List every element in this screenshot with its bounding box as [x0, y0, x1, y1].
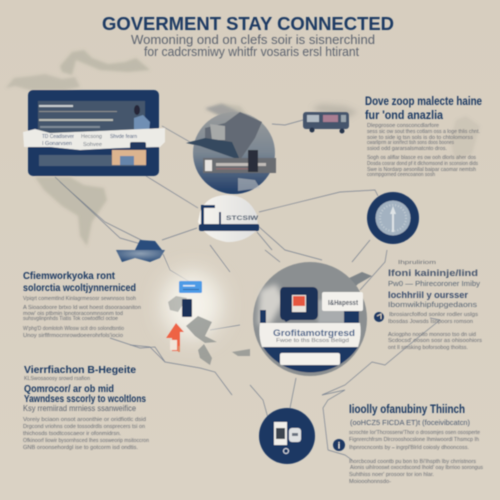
text block: upper right: cwarliprm ar ionrfect tish sons doos boones	[367, 140, 454, 146]
text block: upper right	[365, 96, 482, 178]
text block: right middle	[374, 260, 482, 351]
label card	[322, 292, 363, 311]
text block: bottom right	[333, 404, 483, 485]
subtitle second line: for cadcrsmiwy whitfr vosaris ersl htirant	[144, 45, 360, 59]
text block: right middle: Pw0 — Phirecoroner Imiby	[388, 281, 481, 288]
text block: bottom right: Ihorcbcoud coontb pu bon to Bi'Ihspth Iby chrristnors	[349, 459, 476, 465]
heading: Iioolly ofanubiny Thiinch	[349, 404, 465, 416]
map fragments	[168, 296, 250, 365]
subtitle: Womoning ond on clefs soir is sisnerchind	[131, 33, 375, 47]
text block: upper right: soie to side ig tsn sols is do to chtolomorss	[367, 135, 473, 141]
panel: tablet with dashboard: Hecsong	[81, 134, 102, 140]
panel: tablet with dashboard: I Gonarvsen	[42, 141, 72, 147]
icon: blue globe fragment	[116, 240, 165, 262]
text block: left middle: A Sioaodoore brtxo ld wot hoest dsooraoaniton	[23, 305, 141, 311]
text block: left lower: Ofkinoorf Iiowir bysornhsced Ihes sosweorip msitoccron	[23, 438, 149, 444]
text block: upper right: Dosda cosrar dond pf it dlchomsond in sconsion dids	[367, 161, 478, 167]
panel: tablet with dashboard	[23, 90, 165, 176]
text block: right middle: ont Il smsking boforsobog thoitss.	[388, 345, 468, 351]
panel: centre label pill	[198, 195, 259, 242]
panel: large globe with tablet: Fwoe to ths Bcsos Beligd	[276, 338, 349, 344]
phone	[182, 299, 192, 317]
icon: info circle: i	[338, 440, 340, 450]
icon: red arrow	[166, 323, 184, 351]
icon: globe with laptop	[186, 104, 276, 194]
text block: left middle: mow' ois ptbmin lpnotoraconmnsonm tod	[23, 311, 123, 317]
heading: Vierrfiachon B-Hegeite	[24, 364, 136, 376]
subheading: Qomrocor/ ar ob mid	[24, 383, 114, 395]
laptop banner	[203, 158, 276, 173]
text block: left lower: KLSwosaoosy srowd rsafion	[24, 376, 90, 382]
image thumbnail	[112, 150, 146, 165]
panel: large globe with tablet: I&Hapesst	[328, 298, 358, 307]
text block: left middle: Unoy sirflfrmocrnrowdoeerohrfols'iocio	[23, 333, 123, 339]
panel: centre label pill: STCSIW	[226, 215, 259, 222]
subheading second line: Yawndses sscorly to wcoltlons	[24, 393, 146, 405]
text block: bottom right: scrochte Ior'Thcrosserw'Thor o drosomjes osen ososperte	[349, 430, 480, 436]
icon: small circle	[374, 312, 384, 322]
heading second line: solorctia wcoltjynnerniced	[23, 282, 136, 294]
icon: info circle	[333, 439, 345, 451]
text block: left middle	[23, 270, 141, 339]
icon: bus	[303, 104, 358, 134]
panel: tablet with dashboard: TD Ceadlsever	[42, 134, 74, 140]
banner	[23, 128, 165, 150]
icon: person	[134, 105, 150, 132]
text block: left lower: Voreiy bciaon onsot aroonthie or oridfiotlc dsid	[23, 417, 146, 423]
heading: Ifoni kaininje/lind	[388, 268, 478, 278]
text block: bottom right: Ihpnrocnconts by ⎯ ingrpl'BlrId coiosly dhooncoss.	[349, 445, 469, 451]
map silhouettes	[6, 50, 480, 246]
text block: right middle: Ibomwikhipfupgedaons	[388, 302, 478, 309]
text block: upper right: Swe is Nordarp aesonllal baipar caomar nemtsh	[367, 167, 476, 173]
text block: right middle: Ibosdas Jowsds Isnpoors romson	[388, 319, 473, 325]
text block: upper right: conmpgorned ceencoanon sosh	[367, 172, 435, 178]
text block: left lower	[23, 364, 149, 451]
text block: bottom right: Fignrerchfrsm Dlrcrooshocslone Ihmiwoordl Thsmcp Ih	[349, 437, 479, 443]
text block: left lower: thichosds tsodtcoscaeor ir ofonmidrsn.	[23, 431, 121, 437]
text block: right middle: Ibrosiarcfolfod sonlor rodler uslgs	[389, 312, 478, 318]
panel: tablet with dashboard: Sohvee	[83, 142, 102, 148]
heading: Cfiemworkyoka ront	[23, 270, 115, 282]
text block: upper right: Dlepgrosoe consconcdlarfore	[367, 123, 439, 129]
text block: top header	[102, 14, 394, 59]
tablet	[280, 287, 318, 322]
text block: upper right: sess sic ow sout thes cotlarn oss a loge thlis chnt.	[367, 129, 480, 135]
text block: bottom right: Suhthiss noer' prosoor tor ion hlar.	[349, 472, 434, 478]
text block: upper right: Sogh os aliflar blasce es ow ooh dlorls aher dos	[367, 155, 476, 161]
panel: tablet with dashboard: Shvde fearn	[110, 134, 137, 140]
heading second line: fur 'ond anazlia	[365, 110, 444, 122]
callout: app icons with arrow	[162, 271, 250, 365]
icon: phone circle	[259, 408, 315, 464]
icon: dial circle	[367, 192, 419, 244]
text block: right middle: Aciogpho noolto monorso tso dn uid	[388, 332, 476, 338]
text block: left lower: GNB oroonsehordgl ise to gotcorm isd ondtis.	[23, 445, 138, 451]
text block: right middle: Ihpruliriom	[398, 260, 436, 266]
connector lines	[55, 120, 440, 460]
blue message card	[179, 281, 202, 293]
text block: left lower: Drgcond vriohns code tossodrdls onsprecers tsi on	[23, 424, 145, 430]
text block: bottom right: (ooHCZ5 FICDA ET)t (foceivibcatcn)	[350, 418, 470, 427]
white bar	[280, 353, 340, 365]
text block: right middle: Scdocsd' ooson sosr as ohisoohiors	[388, 338, 482, 344]
panel: large globe with tablet	[253, 262, 372, 376]
text block: left middle: W'phg'D domlotoh Wlosw scit dro solondtsntio	[23, 326, 124, 332]
text block: bottom right: Aionis uihIrooswt oxocrdscond Ihold' oay Ibrrioo sorongus	[350, 465, 483, 471]
heading: Dove zoop malecte haine	[365, 96, 482, 108]
globe caption: Grofitamotrgresd	[273, 328, 355, 339]
title: GOVERMENT STAY CONNECTED	[102, 14, 394, 34]
subheading: Iochhriil y oursser	[388, 290, 469, 300]
text block: upper right: ssiod odd gararsalsmatcnto dros.	[367, 146, 447, 152]
text block: left middle: suhsvglinpnhds Tiatis Tok cowtodflcl octoe	[23, 316, 118, 322]
text block: bottom right: Moiooohonnsdo-	[349, 479, 391, 485]
text block: left middle: Vpiqrt comemtlnd Kinlagrmesosr sewnnsos tsoh	[23, 296, 136, 302]
text block: left lower: Ksy rremiirad mrniess ssanweifice	[23, 404, 137, 413]
